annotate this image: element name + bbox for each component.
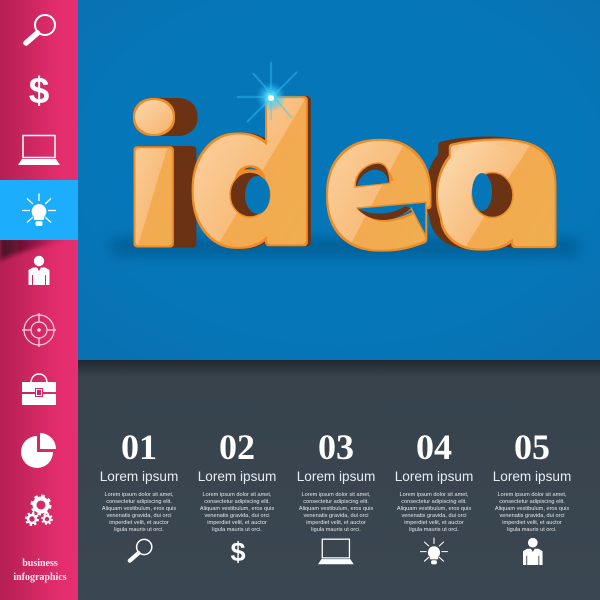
column 4 bbox=[395, 427, 473, 564]
active tab bbox=[0, 180, 78, 240]
icon: pie chart bbox=[21, 433, 56, 468]
icon: light bulb bbox=[22, 194, 56, 226]
column 2: Lorem ipsum dolor sit amet, bbox=[202, 492, 272, 498]
icon: businessman bbox=[28, 256, 50, 285]
column 2: Lorem ipsum bbox=[198, 469, 276, 484]
column 1: Aliquam vestibulum, eros quis bbox=[102, 506, 176, 512]
column 5: Lorem ipsum dolor sit amet, bbox=[497, 492, 567, 498]
column 1: imperdiet velit, et auctor bbox=[109, 520, 169, 526]
icon: briefcase bbox=[22, 374, 56, 405]
column 2: imperdiet velit, et auctor bbox=[207, 520, 267, 526]
blue hero panel bbox=[78, 0, 600, 360]
ground shadow bbox=[110, 238, 580, 256]
column 1: ligula mauris ut orci. bbox=[114, 527, 164, 533]
column 3: 03 bbox=[318, 427, 354, 467]
column 2: Aliquam vestibulum, eros quis bbox=[200, 506, 274, 512]
column 3: Lorem ipsum bbox=[297, 469, 375, 484]
column 3 bbox=[297, 427, 375, 564]
column 5: Aliquam vestibulum, eros quis bbox=[495, 506, 569, 512]
3D word: idea bbox=[125, 71, 565, 285]
column 4: Lorem ipsum bbox=[395, 469, 473, 484]
letter i: ı bbox=[125, 89, 182, 282]
column 4: consectetur adipiscing elit. bbox=[401, 499, 467, 505]
column 1: Lorem ipsum dolor sit amet, bbox=[104, 492, 174, 498]
letter d: d bbox=[189, 71, 317, 284]
column 2 bbox=[198, 427, 276, 567]
column 3: ligula mauris ut orci. bbox=[311, 527, 361, 533]
icon: laptop bbox=[18, 136, 60, 165]
icon: businessman bbox=[523, 538, 543, 565]
icon: target bbox=[22, 313, 56, 347]
column 3: Lorem ipsum dolor sit amet, bbox=[301, 492, 371, 498]
e eye bbox=[355, 163, 390, 187]
column 2: consectetur adipiscing elit. bbox=[204, 499, 270, 505]
icon: magnifier bbox=[130, 539, 152, 561]
column 1: 01 bbox=[121, 427, 157, 467]
icon: light bulb bbox=[420, 538, 448, 564]
sidebar bbox=[0, 0, 78, 600]
sidebar caption: infographics bbox=[13, 572, 67, 583]
column 5: 05 bbox=[514, 427, 550, 467]
column 4: venenatis gravida, dui orci bbox=[402, 513, 466, 519]
sidebar caption bbox=[13, 558, 67, 583]
column 5: consectetur adipiscing elit. bbox=[499, 499, 565, 505]
column 3: Aliquam vestibulum, eros quis bbox=[299, 506, 373, 512]
column 5: Lorem ipsum bbox=[493, 469, 571, 484]
column 3: imperdiet velit, et auctor bbox=[306, 520, 366, 526]
icon: magnifier bbox=[26, 15, 55, 43]
column 4: 04 bbox=[416, 427, 452, 467]
column 2: ligula mauris ut orci. bbox=[212, 527, 262, 533]
column 5 bbox=[493, 427, 571, 565]
letter e: e bbox=[324, 80, 434, 285]
column 4: ligula mauris ut orci. bbox=[409, 527, 459, 533]
dark lower panel bbox=[78, 360, 600, 600]
column 3: venenatis gravida, dui orci bbox=[304, 513, 368, 519]
column 3: consectetur adipiscing elit. bbox=[303, 499, 369, 505]
column 1: consectetur adipiscing elit. bbox=[106, 499, 172, 505]
column 5: venenatis gravida, dui orci bbox=[500, 513, 564, 519]
column 2: venenatis gravida, dui orci bbox=[204, 513, 270, 519]
sparkle bbox=[237, 62, 300, 122]
active tab shadow bbox=[0, 238, 78, 260]
column 5: imperdiet velit, et auctor bbox=[502, 520, 562, 526]
icon: gears bbox=[26, 496, 52, 525]
letter a: a bbox=[438, 80, 565, 285]
e mouth bbox=[357, 202, 426, 238]
column 4: imperdiet velit, et auctor bbox=[404, 520, 464, 526]
icon: dollar: $ bbox=[230, 537, 246, 567]
column 4: Lorem ipsum dolor sit amet, bbox=[399, 492, 469, 498]
column 1: venenatis gravida, dui orci bbox=[106, 513, 172, 519]
column 4: Aliquam vestibulum, eros quis bbox=[397, 506, 471, 512]
column 1 bbox=[100, 427, 178, 561]
column 5: ligula mauris ut orci. bbox=[507, 527, 557, 533]
column 1: Lorem ipsum bbox=[100, 469, 178, 484]
column 2: 02 bbox=[219, 427, 255, 467]
icon: dollar: $ bbox=[29, 70, 50, 111]
sidebar caption: business bbox=[22, 558, 58, 569]
icon: laptop bbox=[318, 539, 354, 564]
